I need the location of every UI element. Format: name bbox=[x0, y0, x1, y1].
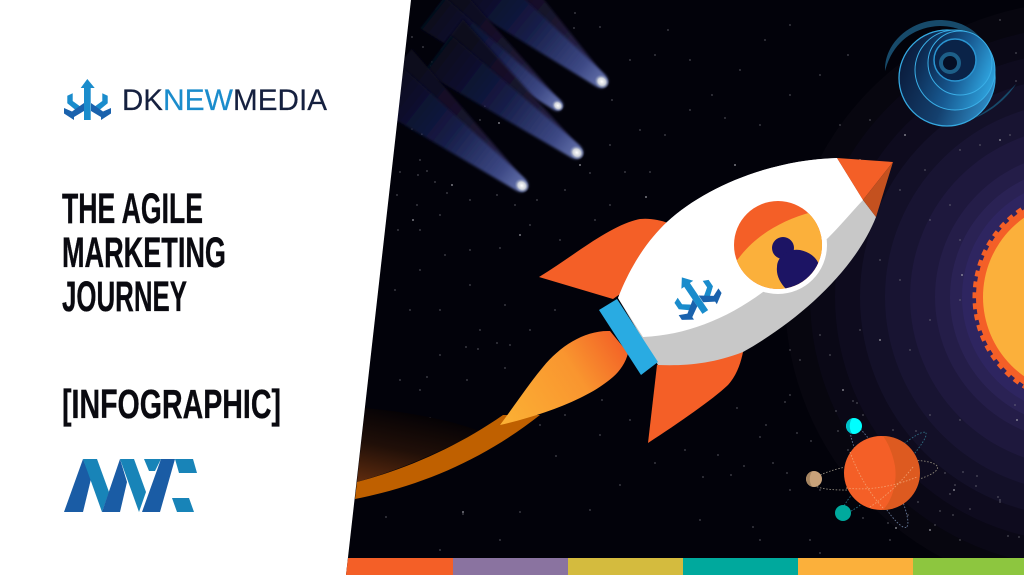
star field bbox=[386, 13, 1019, 553]
orange planet with moons bbox=[806, 418, 939, 532]
white left panel bbox=[0, 0, 411, 575]
nose cone bbox=[837, 158, 893, 200]
rear orbits bbox=[811, 420, 939, 532]
title bbox=[62, 185, 226, 321]
flame bbox=[500, 331, 628, 425]
rocket bbox=[500, 158, 893, 443]
title: MARKETING bbox=[62, 229, 226, 277]
spiral galaxy bbox=[885, 20, 1016, 126]
exhaust glow bbox=[357, 408, 480, 482]
front orbits bbox=[846, 452, 917, 508]
colour strip bbox=[346, 558, 1024, 575]
comet 4 bbox=[369, 49, 553, 214]
top fin bbox=[539, 219, 668, 299]
window rim bbox=[729, 196, 827, 294]
title: THE AGILE bbox=[62, 185, 203, 233]
moon: cyan bbox=[846, 418, 862, 434]
nose shadow bbox=[863, 162, 893, 217]
moon: teal bbox=[835, 505, 851, 521]
nozzle band bbox=[599, 299, 658, 375]
planet bbox=[844, 436, 918, 510]
window bbox=[734, 201, 822, 289]
rocket logo bbox=[662, 264, 725, 325]
subtitle: [INFOGRAPHIC] bbox=[62, 381, 281, 427]
nebula glow around sun bbox=[785, 2, 1024, 575]
body shadow bbox=[618, 158, 876, 365]
logo: DK New Media: NEW bbox=[163, 84, 234, 117]
logo: MTC bbox=[64, 459, 197, 512]
title: JOURNEY bbox=[62, 273, 187, 321]
comet 1 bbox=[450, 0, 636, 110]
comet 2 bbox=[420, 0, 584, 129]
body highlight bbox=[618, 158, 863, 337]
logo: DK New Media: DK bbox=[122, 84, 163, 117]
comet 3 bbox=[423, 19, 606, 180]
exhaust trail bbox=[355, 415, 540, 499]
sun bbox=[974, 192, 1024, 402]
moon: tan bbox=[806, 471, 822, 487]
logo: DK New Media: MEDIA bbox=[233, 84, 327, 117]
logo: DK New Media bbox=[64, 79, 327, 120]
bottom fin bbox=[648, 350, 743, 443]
